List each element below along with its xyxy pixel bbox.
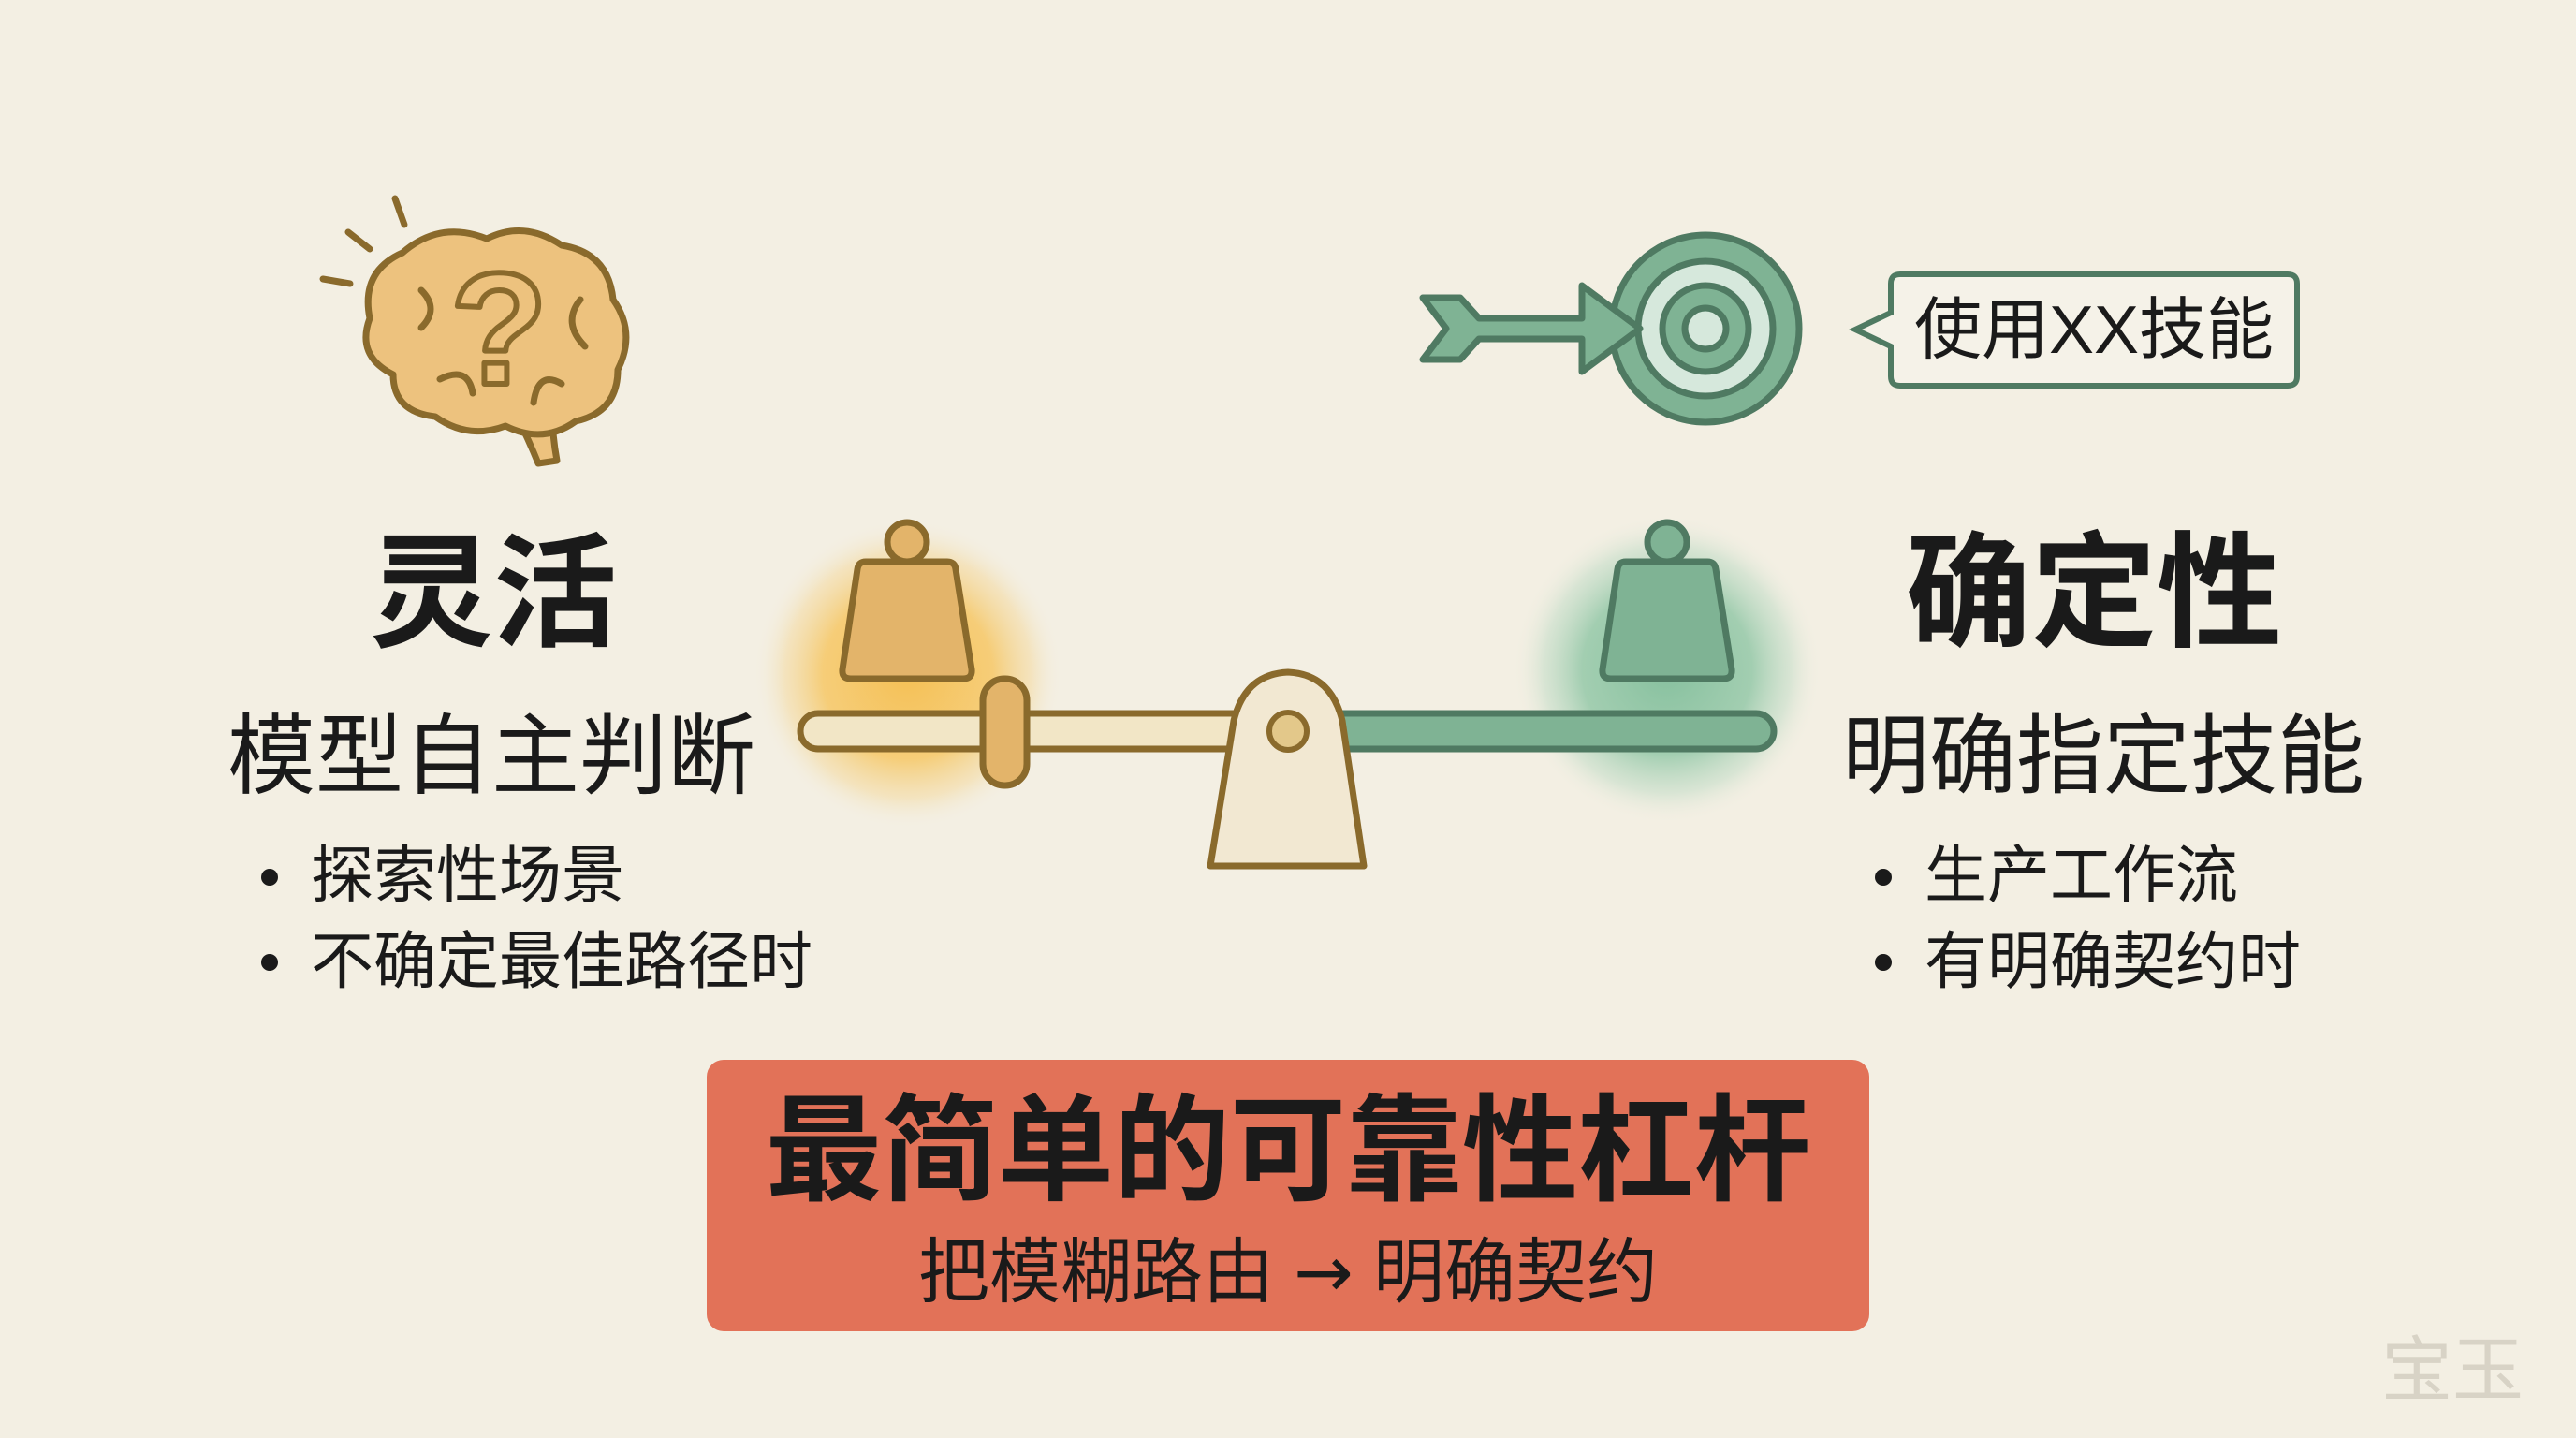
handle cap left <box>983 679 1027 785</box>
beam left <box>800 713 1268 749</box>
weight right <box>1603 522 1732 679</box>
bullet list left: 探索性场景 <box>311 841 624 911</box>
bullet list right <box>1875 841 2301 997</box>
glow: left <box>754 520 1062 829</box>
banner: key takeaway <box>707 1060 1869 1331</box>
icon: arrow into target <box>1423 235 1799 422</box>
subtitle: 模型自主判断: 模型自主判断 <box>227 707 755 805</box>
title: 确定性: 确定性 <box>1906 524 2282 664</box>
banner: key takeaway: 把模糊路由 → 明确契约 <box>918 1230 1658 1313</box>
bullet list right: 生产工作流 <box>1925 841 2238 911</box>
beam right <box>1292 713 1774 749</box>
subtitle: 明确指定技能: 明确指定技能 <box>1842 708 2364 805</box>
callout: 使用XX技能: 使用XX技能 <box>1914 293 2274 368</box>
icon: brain with question mark: ? <box>450 241 548 418</box>
bullet list left: 不确定最佳路径时 <box>311 927 812 997</box>
icon: brain with question mark <box>323 198 626 463</box>
banner: key takeaway: 最简单的可靠性杠杆 <box>766 1087 1810 1216</box>
callout: 使用XX技能 <box>1855 274 2297 386</box>
seesaw <box>754 515 1822 866</box>
glow: right <box>1513 515 1822 824</box>
bullet list left <box>261 841 812 997</box>
title: 灵活: 灵活 <box>370 525 617 663</box>
weight left <box>842 522 972 679</box>
watermark: 宝玉 <box>2381 1331 2524 1411</box>
bullet list right: 有明确契约时 <box>1925 927 2301 997</box>
fulcrum <box>1210 672 1364 866</box>
